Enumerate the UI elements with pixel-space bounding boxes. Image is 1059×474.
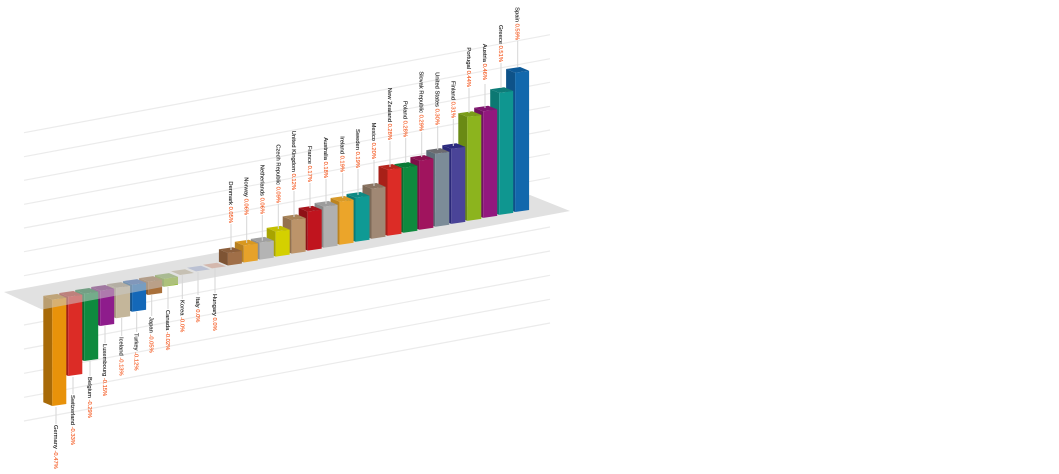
bar: France [299,206,322,251]
label: Hungary [211,268,217,331]
negative bars [43,263,226,406]
label: France: France 0.17% [306,146,312,182]
bar: Denmark [219,247,242,266]
label: Czech Republic: Czech Republic 0.09% [274,144,280,203]
label: Spain: Spain 0.59% [514,7,520,40]
label: Turkey: Turkey -0.12% [133,333,139,370]
bar: Slovak Republic [410,155,433,230]
label: Luxembourg: Luxembourg -0.15% [101,344,107,396]
label: Portugal [465,47,471,113]
label: Mexico [370,123,376,186]
label: Slovak Republic: Slovak Republic 0.29% [418,71,424,131]
label: Canada [164,287,170,350]
label: Norway: Norway 0.06% [243,177,249,215]
bar: Portugal [458,111,481,221]
bar: Hungary [203,263,226,268]
label: New Zealand: New Zealand 0.28% [386,88,392,140]
bar: Luxembourg [91,285,114,326]
label: Ireland [339,136,345,198]
label: Sweden [354,129,360,195]
label: Korea: Korea -0.0% [178,300,184,332]
label: Turkey [133,312,139,370]
label: Slovak Republic [418,71,424,157]
label: Canada: Canada -0.02% [164,310,170,350]
bar: Finland [442,143,465,224]
label: Finland [449,81,455,146]
bar: Poland [394,162,417,233]
bar: United Kingdom [283,214,306,254]
label: Germany: Germany -0.47% [52,425,58,469]
bar: Greece [490,87,513,215]
label: Poland: Poland 0.28% [402,101,408,137]
bar: Canada [155,273,178,287]
label: Japan [148,295,154,353]
label: Greece: Greece 0.51% [497,25,503,62]
bar: New Zealand [378,164,402,236]
label: Austria: Austria 0.46% [481,44,487,80]
bar: Netherlands [251,237,274,260]
bar: Korea [171,269,194,275]
country labels [52,7,520,469]
label: Greece [497,25,503,88]
label: United States [434,72,440,150]
label: Australia: Australia 0.18% [322,137,328,178]
zero plane [4,195,570,310]
label: Netherlands: Netherlands 0.06% [258,165,264,214]
bar: Germany [43,294,66,406]
label: Sweden: Sweden 0.19% [354,129,360,168]
label: United States: United States 0.30% [434,72,440,125]
label: Finland: Finland 0.31% [449,81,455,118]
bar: Ireland [331,196,354,245]
label: France [306,146,312,208]
bar: Belgium [75,288,98,361]
label: Korea [178,275,184,332]
bar: Sweden [346,192,370,242]
label: Belgium: Belgium -0.29% [86,377,92,418]
label: Switzerland: Switzerland -0.33% [69,395,75,445]
label: Japan: Japan -0.05% [148,317,154,353]
bar: Japan [139,276,162,295]
bar: Czech Republic [267,226,290,257]
label: New Zealand [386,88,392,167]
label: Spain [514,7,520,67]
label: Hungary: Hungary 0.0% [211,294,217,331]
label: Australia [322,137,328,204]
label: Italy: Italy 0.0% [194,297,200,322]
label: Netherlands [258,165,264,241]
label: Denmark [227,181,233,250]
positive bars [219,67,529,266]
bar: Mexico [362,183,386,239]
bar: Turkey [123,279,146,312]
bar: Australia [315,201,338,248]
label: Portugal: Portugal 0.44% [465,47,471,87]
bar: United States [426,148,449,227]
label: Ireland: Ireland 0.19% [339,136,345,172]
bar: Spain [506,67,529,212]
label: Iceland [118,318,124,376]
label: Mexico: Mexico 0.20% [370,123,376,159]
bar: Iceland [107,282,130,318]
label: Norway [243,177,249,243]
bar: Switzerland [59,291,82,376]
label: Denmark: Denmark 0.05% [227,181,233,223]
label: United Kingdom: United Kingdom 0.12% [290,131,296,190]
bar: Austria [474,106,497,218]
label: Italy [194,272,200,322]
label: Austria [481,44,487,108]
label: Iceland: Iceland -0.13% [118,337,124,376]
label: Poland [402,101,408,163]
bar: Norway [235,240,258,262]
label: United Kingdom [290,131,296,217]
label: Czech Republic [274,144,280,229]
bar: Italy [187,266,210,271]
